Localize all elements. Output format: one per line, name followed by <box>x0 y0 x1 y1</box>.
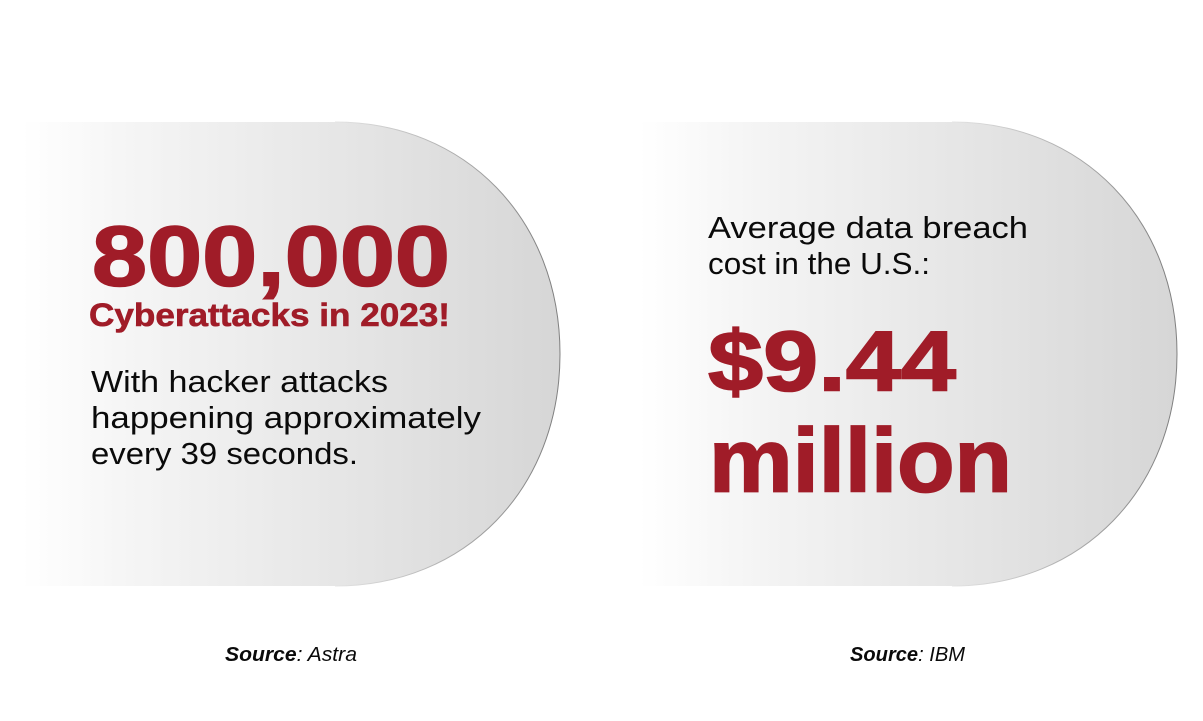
body text: attack frequency: With hacker attacks <box>91 364 388 399</box>
body text: attack frequency: every 39 seconds. <box>91 436 358 471</box>
panel background: right rounded shape <box>639 122 1177 586</box>
source: Astra: Source: Astra <box>225 644 357 666</box>
body text: average breach cost <box>708 210 1028 281</box>
source: IBM: Source: IBM <box>850 644 965 666</box>
big number: $9.44 million <box>708 314 1012 512</box>
subheading: cyberattacks in 2023: Cyberattacks in 2023! <box>89 297 450 333</box>
big number: 800,000: 800,000 <box>92 210 450 304</box>
panel: data breach cost <box>639 122 1177 586</box>
body text: average breach cost: Average data breach <box>708 210 1028 245</box>
panel background: left rounded shape <box>22 122 560 586</box>
big number: $9.44 million: million <box>709 412 1012 512</box>
body text: average breach cost: cost in the U.S.: <box>708 246 930 281</box>
body text: attack frequency <box>91 364 482 471</box>
big number: $9.44 million: $9.44 <box>708 314 956 410</box>
panel: cyberattacks <box>22 122 560 586</box>
body text: attack frequency: happening approximately <box>91 400 482 435</box>
